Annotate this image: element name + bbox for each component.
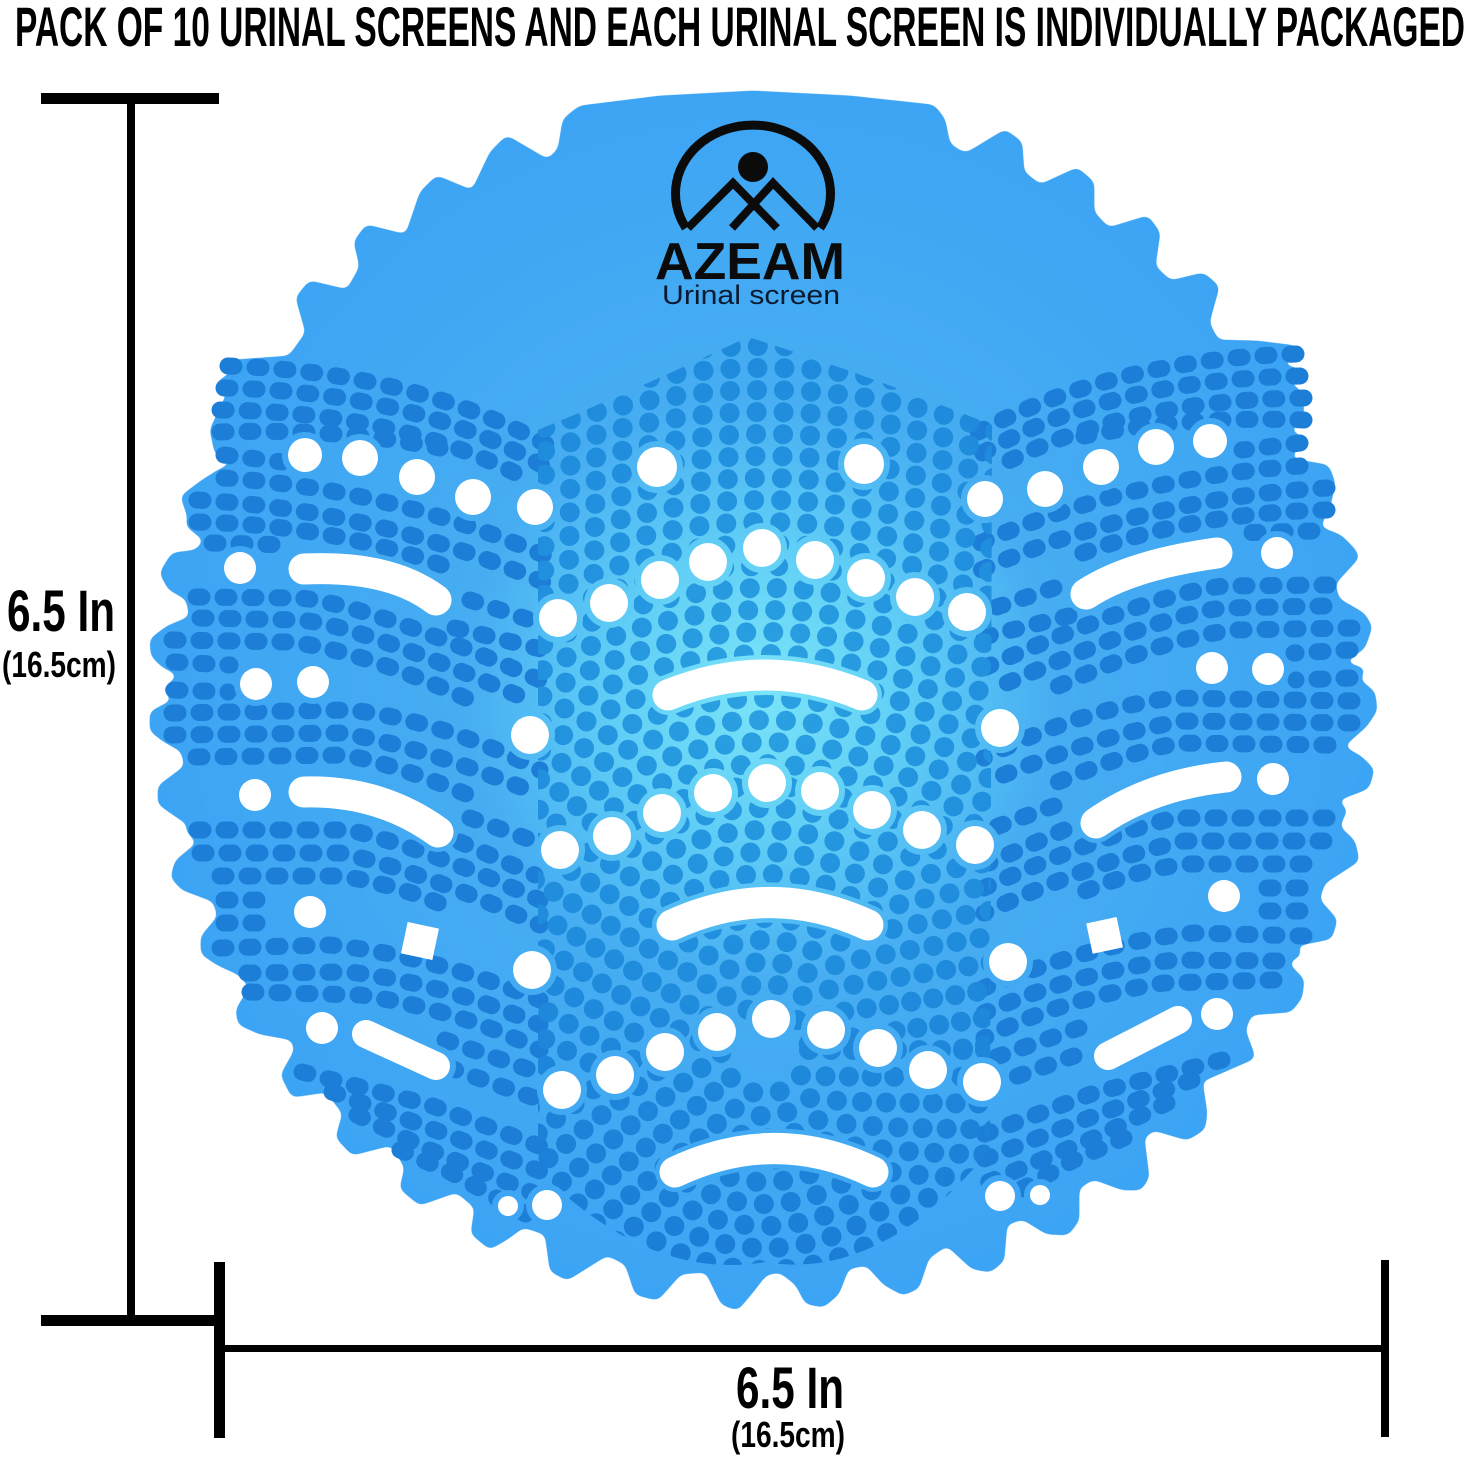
screen body with toothed edge and hanging tab xyxy=(152,93,1375,1308)
slots xyxy=(304,553,1226,1172)
width dimension bracket xyxy=(214,1260,1389,1438)
slot halos xyxy=(304,553,1226,1172)
product name: Urinal screen xyxy=(662,280,840,310)
brand name: AZEAM xyxy=(655,233,845,291)
height value: 6.5 In xyxy=(7,579,115,644)
right spikes xyxy=(964,354,1352,1210)
left spikes xyxy=(172,366,560,1222)
logo sun xyxy=(738,152,768,182)
width value: 6.5 In xyxy=(736,1356,844,1421)
urinal screen product xyxy=(152,93,1375,1336)
width value in cm: (16.5cm) xyxy=(731,1414,845,1455)
height dimension bracket xyxy=(41,93,219,1326)
logo mountains xyxy=(688,183,817,228)
holes xyxy=(224,424,1293,1220)
centre spikes xyxy=(538,338,992,1265)
logo arc xyxy=(676,125,830,228)
brand logo xyxy=(655,125,845,310)
height value in cm: (16.5cm) xyxy=(2,644,116,685)
square openings xyxy=(401,917,1123,960)
